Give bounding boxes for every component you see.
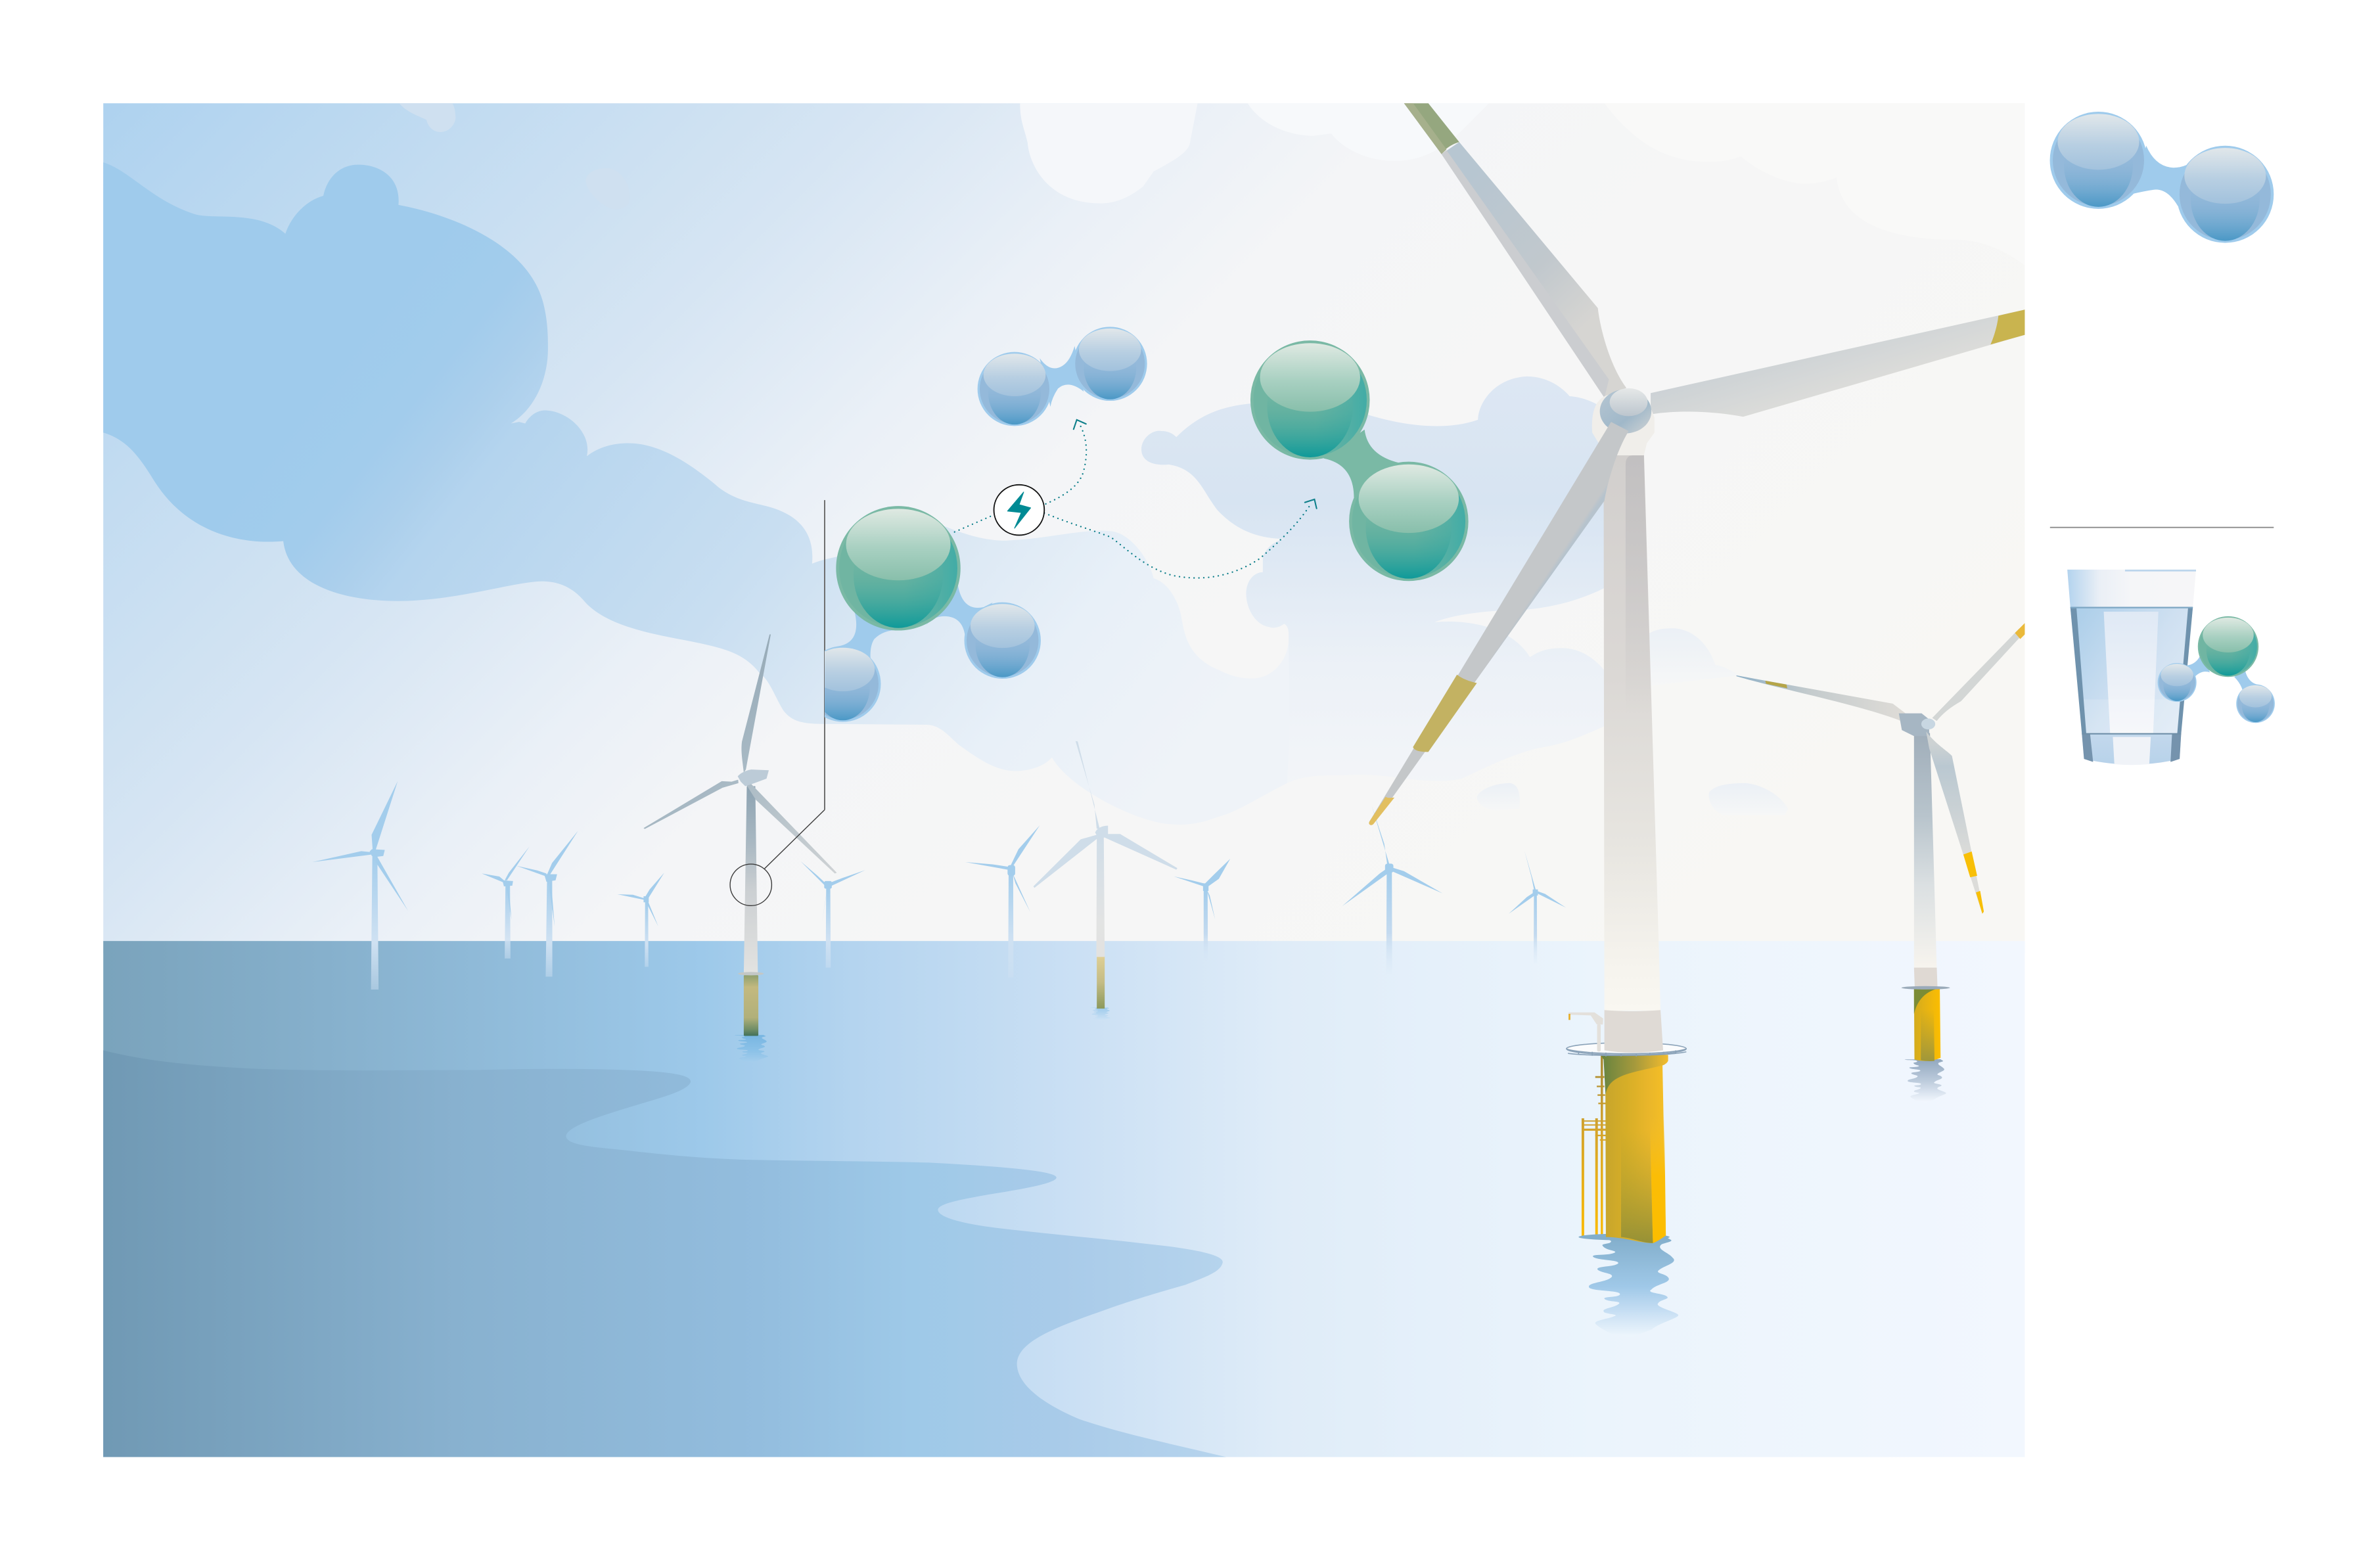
blades and nacelle (643, 635, 836, 873)
hub (1921, 719, 1935, 729)
ripple (734, 1035, 768, 1062)
mid-distance turbine with olive pile (1034, 741, 1178, 1020)
platform front rail (1567, 1049, 1686, 1057)
yellow monopile (1601, 1055, 1668, 1243)
blade band (1765, 681, 1787, 689)
blade: lower left (1369, 422, 1629, 825)
blade: left (1737, 675, 1917, 725)
tower base section (1605, 1010, 1663, 1053)
ripple reflection (1582, 1236, 1678, 1337)
distant turbine 1 (312, 781, 408, 990)
tower (1914, 733, 1936, 969)
blade yellow bands (1963, 852, 1984, 914)
legend: water molecule icon (2158, 616, 2275, 723)
distant turbine 5 (801, 861, 865, 968)
bond: oxygen to right hydrogen (926, 584, 993, 639)
faint clouds right of tower (1481, 628, 1775, 796)
distant turbine 3 (516, 831, 578, 976)
bond: oxygen to left hydrogen (836, 612, 898, 691)
legend: glass of water (2067, 570, 2196, 765)
right hydrogen atom (965, 603, 1041, 679)
shadow at base (1578, 1233, 1670, 1241)
blade tip up right (2015, 623, 2025, 639)
nacelle (1592, 395, 1655, 455)
legend divider (2050, 527, 2274, 528)
dark shallow water area (103, 1050, 1226, 1457)
distant turbine 10 (1509, 851, 1566, 964)
hydrogen molecule (H2) in scene (978, 327, 1147, 426)
platform collar (738, 972, 764, 975)
near right turbine (1737, 622, 2028, 1103)
large blue cloud bank (103, 162, 1216, 806)
platform back rail (1567, 1043, 1686, 1055)
blade: up right (1933, 622, 2028, 721)
blade: top left (1404, 103, 1626, 398)
water molecule (H2O) in scene (805, 506, 1041, 722)
tower (744, 787, 758, 974)
panel: offshore wind farm scene (103, 103, 2028, 1457)
blade: right (1651, 309, 2025, 417)
yellow monopile (1914, 989, 1940, 1061)
callout line and circle on turbine (730, 500, 825, 905)
nacelle (1899, 714, 1929, 736)
ladder and access rack (1582, 1055, 1606, 1237)
platform (1902, 986, 1950, 990)
large foreground turbine (1369, 103, 2025, 1337)
water (2071, 607, 2193, 734)
sea (103, 941, 2025, 1457)
oxygen molecule (O2) in scene (1250, 340, 1469, 581)
service crane (1568, 1013, 1603, 1051)
blade: down (1926, 731, 1984, 914)
hub (1600, 388, 1651, 433)
dotted reaction arrows (955, 420, 1317, 578)
ripple (1904, 1059, 1946, 1103)
icon: lightning bolt in circle (994, 485, 1044, 535)
distant turbine 9 (1342, 806, 1442, 974)
sky background (103, 103, 2025, 953)
distant turbine 8 (1174, 859, 1230, 964)
oxygen atom (836, 506, 961, 631)
legend: hydrogen molecule icon (2050, 112, 2274, 243)
tower shading (1626, 455, 1651, 714)
left hydrogen atom (clipped at line) (805, 646, 881, 722)
distant turbine 6 (966, 825, 1040, 958)
tower upper (1603, 449, 1660, 1011)
monopile (744, 975, 758, 1036)
cloud behind green molecule (1141, 377, 1603, 628)
small pale clouds top left (400, 104, 456, 132)
glass upper (2067, 570, 2196, 607)
highlight (2104, 612, 2159, 736)
glass base (2082, 734, 2181, 765)
distant turbine 2 (482, 846, 530, 959)
dark glass edges (2071, 607, 2086, 734)
highlighted medium turbine (643, 635, 836, 1062)
white clouds along top edge (1020, 104, 1300, 204)
tower base (1914, 968, 1938, 989)
distant turbine 4 (618, 873, 664, 967)
